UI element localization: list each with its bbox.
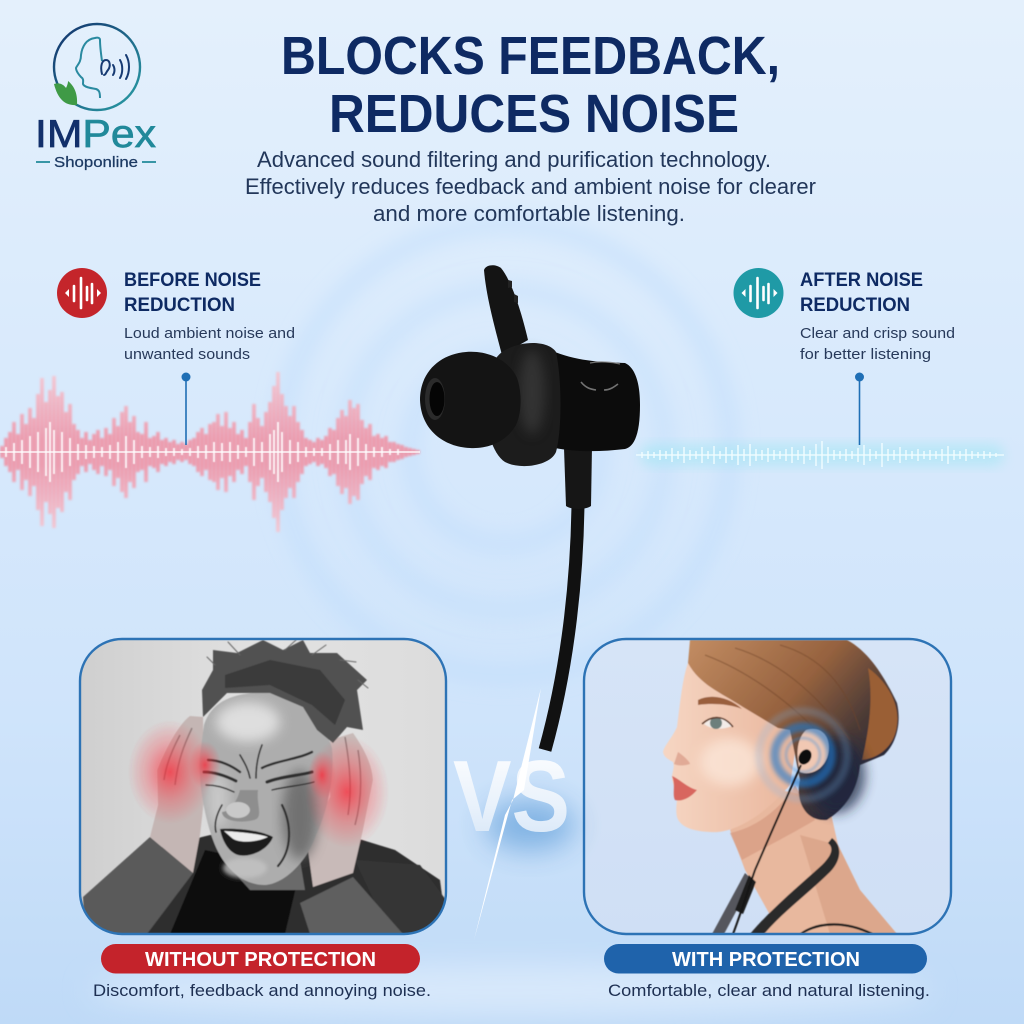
- earbud back housing: [555, 352, 640, 451]
- before description: unwanted sounds: [124, 346, 250, 363]
- woman neck and chest: [730, 790, 838, 933]
- woman eye: [702, 717, 733, 729]
- woman hair strands: [705, 645, 860, 745]
- woman face: [663, 660, 800, 832]
- title: BLOCKS FEEDBACK,: [281, 26, 780, 86]
- woman brow: [698, 697, 742, 709]
- man sleeves: [83, 837, 193, 934]
- logo tagline: Shoponline: [54, 154, 138, 171]
- logo: [35, 24, 157, 171]
- woman cheek highlight: [700, 738, 760, 786]
- woman jaw shadow: [730, 785, 815, 860]
- after description: for better listening: [800, 346, 931, 363]
- VS lightning slash: [474, 688, 541, 940]
- caption: without protection: Discomfort, feedback and annoying noise.: [93, 981, 431, 1000]
- woman nose shadow: [674, 752, 690, 766]
- VS letters: VS: [453, 741, 570, 853]
- man finger lines: [164, 728, 361, 825]
- clean waveform: [636, 441, 1004, 469]
- before description: Loud ambient noise and: [124, 325, 295, 342]
- pointer: before: [182, 372, 190, 445]
- man face: [200, 692, 333, 885]
- label: without protection: [101, 944, 420, 974]
- title: REDUCES NOISE: [329, 84, 739, 144]
- man hair wisps: [207, 640, 368, 688]
- man nose: [222, 790, 259, 822]
- woman dark hair shade: [805, 737, 865, 813]
- before heading: [124, 270, 261, 316]
- noisy waveform: [0, 372, 420, 532]
- man wrinkles and eyes: [204, 745, 314, 866]
- logo head profile: [76, 38, 102, 98]
- man red glow: [130, 723, 207, 819]
- earbud gloss: [581, 362, 620, 390]
- woman strap: [801, 924, 872, 934]
- ear tip opening: [425, 378, 445, 420]
- VS glow: [485, 799, 575, 851]
- before description: [124, 325, 295, 363]
- woman ear: [798, 729, 829, 773]
- ear tip: [420, 352, 521, 448]
- logo leaf: [54, 81, 77, 105]
- label: with protection: [604, 944, 927, 974]
- subtitle: Effectively reduces feedback and ambient noise for clearer: [245, 174, 816, 199]
- subtitle: and more comfortable listening.: [373, 201, 685, 226]
- man left hand: [150, 716, 204, 873]
- earbud product: [420, 265, 640, 750]
- woman hair: [688, 640, 899, 820]
- earbud cable: [545, 505, 578, 750]
- logo ear and sound waves: [101, 55, 129, 79]
- VS badge: [453, 688, 575, 940]
- subtitle: Advanced sound filtering and purification technology.: [257, 147, 771, 172]
- photo: man without protection: [80, 639, 447, 934]
- pill text: WITH PROTECTION: [672, 949, 860, 971]
- sound rings behind earbud: [280, 225, 730, 675]
- man neck: [238, 863, 306, 891]
- woman card border: [584, 639, 951, 934]
- woman right neckband: [750, 838, 839, 934]
- woman earbud: [798, 748, 812, 766]
- pointer: after: [855, 372, 864, 445]
- pill text: WITHOUT PROTECTION: [145, 949, 376, 971]
- photo: woman with protection: [584, 639, 951, 934]
- man mouth: [220, 829, 273, 856]
- subtitle: [245, 147, 816, 226]
- earbud collar: [486, 343, 560, 466]
- after description: [800, 325, 955, 363]
- before heading: BEFORE NOISE: [124, 270, 261, 291]
- after description: Clear and crisp sound: [800, 325, 955, 342]
- after heading: [800, 270, 923, 316]
- woman earbud cable: [733, 765, 801, 934]
- woman lips: [672, 776, 697, 801]
- after noise reduction block: [734, 268, 955, 363]
- earbud fin: [484, 265, 528, 355]
- man shirt: [147, 834, 442, 933]
- after heading: REDUCTION: [800, 295, 910, 316]
- title: [281, 26, 780, 144]
- woman left neckband: [712, 872, 749, 933]
- logo wordmark: IMPex: [35, 113, 157, 156]
- blue pill: [604, 944, 927, 974]
- red pill: [101, 944, 420, 974]
- man right hand: [307, 733, 373, 887]
- logo ring: [54, 24, 140, 110]
- before noise reduction block: [57, 268, 295, 363]
- icon: teal sound wave: [734, 268, 784, 318]
- after heading: AFTER NOISE: [800, 270, 923, 291]
- man card border: [80, 639, 446, 934]
- ear glow rings: [759, 711, 847, 799]
- before heading: REDUCTION: [124, 295, 235, 316]
- woman bun: [862, 668, 897, 760]
- logo tagline dashes: [36, 161, 156, 163]
- man hair: [202, 640, 367, 743]
- earbud stem: [564, 446, 592, 509]
- caption: with protection: Comfortable, clear and natural listening.: [608, 981, 930, 1000]
- icon: red sound wave: [57, 268, 107, 318]
- earbud buttons: [508, 280, 518, 303]
